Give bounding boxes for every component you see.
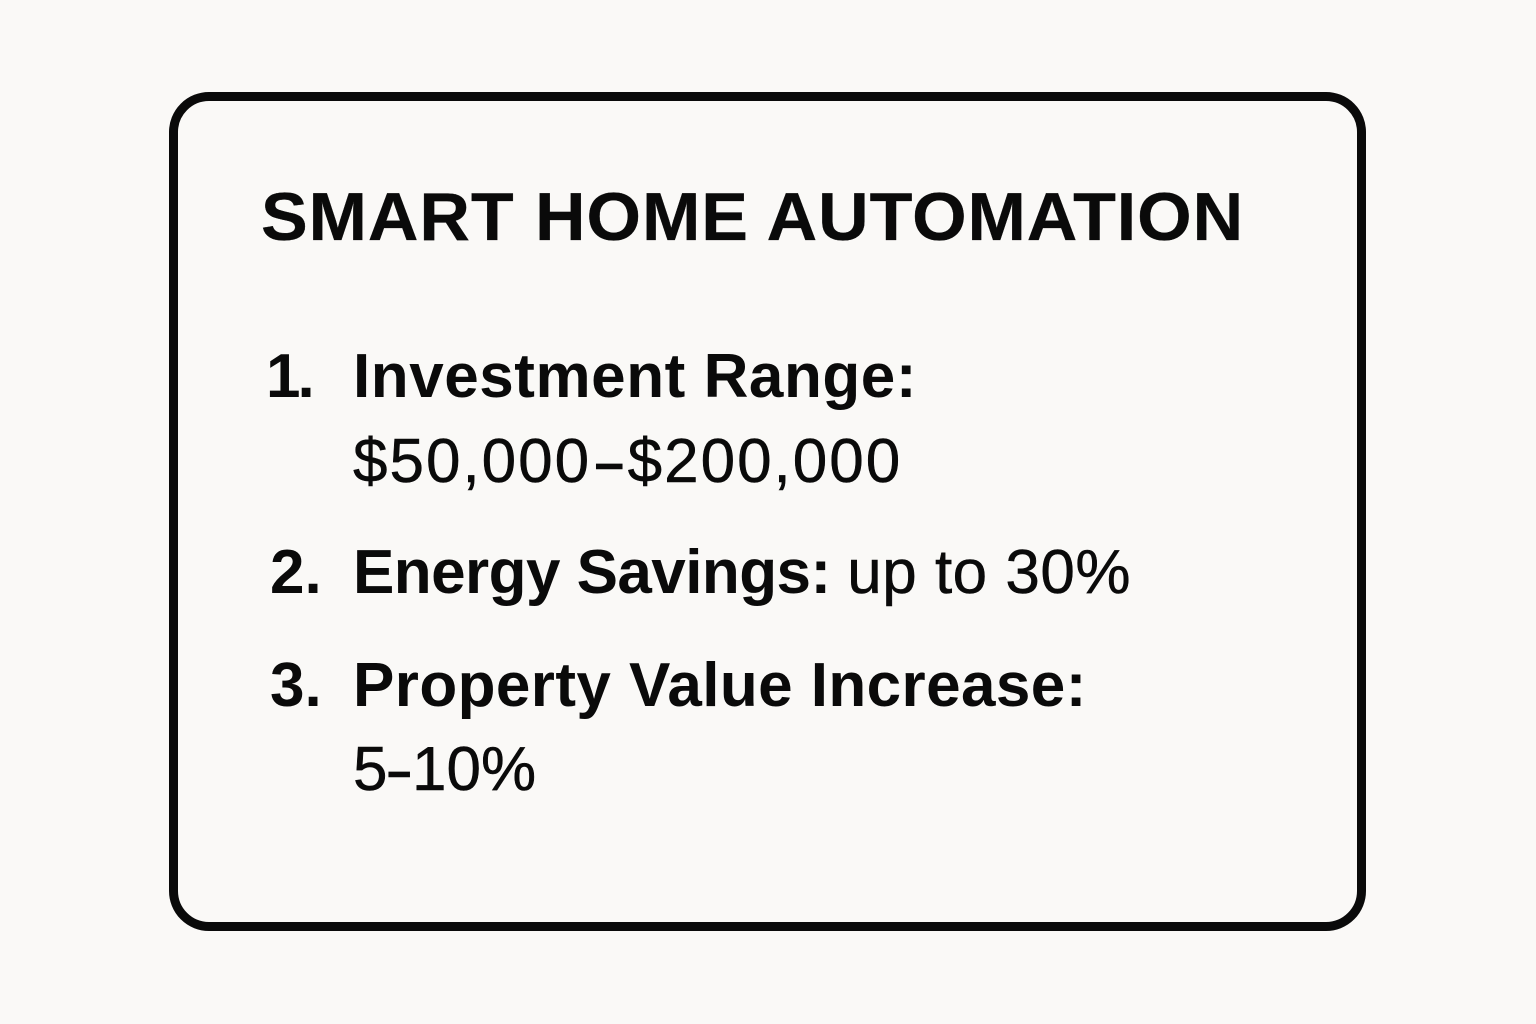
list item 3 label: Property Value Increase:	[353, 651, 1087, 720]
title: SMART HOME AUTOMATION	[261, 179, 1244, 255]
list item 3 number: 3.	[270, 651, 322, 720]
list item 2 number: 2.	[270, 538, 322, 607]
list item 2 text: Energy Savings: up to 30%	[353, 538, 1131, 607]
list item 1 value: $50,000 $200,000	[353, 427, 902, 496]
list item 1 number: 1.	[266, 342, 312, 411]
list item 1 value: –	[597, 427, 622, 496]
list item 3 value: 5 10%	[353, 735, 536, 804]
list item 1 label: Investment Range:	[353, 342, 917, 411]
panel: smart home automation card	[169, 92, 1366, 931]
list item 3 value: –	[389, 735, 410, 804]
